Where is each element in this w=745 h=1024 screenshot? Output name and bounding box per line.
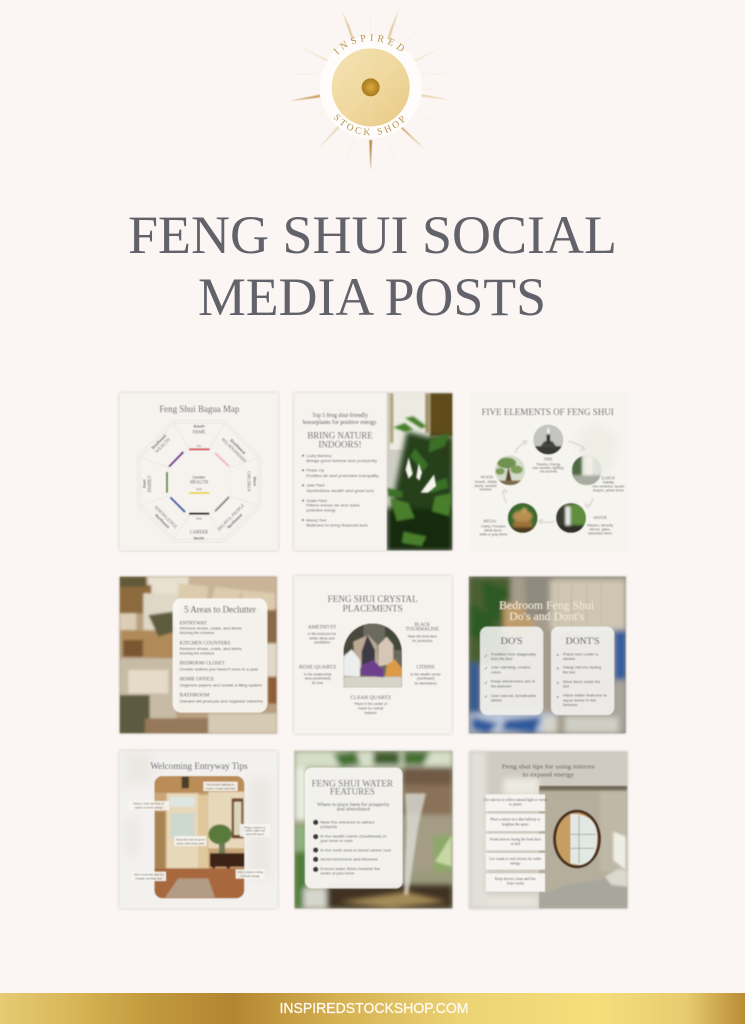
heading: to expand energy	[522, 771, 575, 778]
water feature checklist: Ensure water flows towards the	[320, 867, 380, 871]
element captions: FIRE	[544, 456, 553, 461]
round mirror	[553, 810, 601, 868]
don'ts card	[551, 627, 614, 715]
panel: Five Elements post	[474, 408, 625, 538]
bagua labels: North	[194, 535, 205, 540]
crystal captions	[299, 623, 442, 715]
bagua labels: West	[252, 477, 257, 487]
bagua labels: Center	[193, 475, 206, 480]
water feature checklist: In the wealth corner (Southeast) of	[320, 834, 387, 838]
subheading: houseplants for positive energy.	[303, 419, 378, 426]
title	[128, 205, 617, 327]
plant list: Purifies air and promotes tranquility	[306, 474, 379, 478]
declutter list: blocking the entrance	[180, 651, 214, 655]
subheading	[303, 412, 378, 426]
don'ts card: ×	[556, 653, 559, 658]
crystal captions: area (southwest)	[305, 677, 331, 681]
panel: Mirrors tips post: Use mirrors to reflect natural light or views	[484, 798, 548, 802]
panel: Welcoming Entryway Tips post: create a warm welcome	[205, 786, 236, 790]
plant list: Believed to bring financial luck	[306, 524, 368, 528]
element captions: white or gray items	[479, 532, 508, 536]
panel: Welcoming Entryway Tips post: Add a welcome mat for	[134, 872, 165, 876]
don'ts card: Hang mirrors facing	[563, 666, 601, 670]
bagua labels: Fire	[197, 445, 202, 448]
bagua labels: RELATIONSHIPS	[221, 437, 248, 464]
tip labels	[486, 794, 545, 892]
crystal captions: ROSE QUARTZ	[299, 666, 337, 671]
element captions: Use ceramics, square	[592, 485, 625, 489]
plant list: protective energy	[306, 509, 336, 513]
heading: FENG SHUI CRYSTAL	[328, 594, 418, 604]
panel: Welcoming Entryway Tips post: Keep the door in good	[176, 837, 205, 841]
panel: Welcoming Entryway Tips post: repair with fresh paint	[176, 841, 204, 845]
heading	[502, 764, 595, 778]
crystal captions: In the bedroom for	[308, 632, 337, 636]
do's card: ✓	[484, 694, 488, 700]
panel: Mirrors tips post: energy	[510, 861, 520, 865]
crystal captions: In the wealth corner	[410, 672, 442, 676]
do's card: colors	[491, 671, 501, 675]
card subheading: Where to place them for prosperity	[317, 803, 390, 808]
panel: Mirrors tips post: or plants	[509, 802, 522, 806]
subheading: Top 5 feng shui-friendly	[312, 412, 368, 419]
crystal captions: (southeast)	[417, 677, 434, 681]
tip labels	[128, 782, 270, 881]
panel: Crystal Placements post	[294, 576, 452, 734]
logo: Inspired Stock Shop sun emblem	[290, 11, 450, 170]
declutter list: Remove shoes, coats, and items	[180, 647, 242, 651]
plant list	[302, 454, 379, 528]
crystal captions: Place in the center of	[354, 702, 387, 706]
bedroom photo	[469, 577, 626, 733]
don'ts card: DONT'S	[566, 636, 600, 647]
heading: Feng shui tips for using mirrors	[502, 764, 595, 771]
entryway photo	[154, 776, 245, 898]
bagua labels: Southeast	[150, 433, 168, 450]
element captions: Wisdom, Serenity	[587, 524, 613, 528]
crystal captions: better sleep and	[309, 636, 335, 640]
crystal captions: for love	[312, 681, 323, 685]
bagua octagon	[138, 420, 261, 542]
bagua labels: East	[142, 479, 147, 488]
panel: Welcoming Entryway Tips post: Add a plant to bring	[238, 870, 263, 874]
water feature checklist: Near the entrance to attract	[320, 820, 375, 824]
title: MEDIA POSTS	[198, 267, 546, 327]
plant list: Brings good fortune and prosperity	[306, 459, 377, 463]
bagua labels: KNOWLEDGE	[153, 506, 178, 530]
do's card: Keep electronics out of	[491, 679, 536, 683]
heading: PLACEMENTS	[343, 603, 403, 613]
water feature checklist: center of your home	[320, 872, 354, 876]
bagua labels: FAMILY	[148, 475, 153, 492]
crystal captions: meditation	[314, 641, 330, 645]
element captions: shapes, yellow tones	[593, 488, 624, 492]
panel: Mirrors tips post: Use round or oval mirrors for softer	[489, 857, 542, 861]
panel: Welcoming Entryway Tips post: Use proper lighting to	[206, 783, 235, 787]
element captions: Stability	[603, 481, 614, 485]
do's card: DO'S	[501, 636, 523, 647]
bagua labels: Southwest	[229, 437, 247, 456]
declutter list: blocking the entrance	[180, 631, 214, 635]
declutter list: KITCHEN COUNTERS	[180, 642, 231, 647]
water feature checklist: prosperity	[320, 825, 337, 829]
element captions: black/blue items	[588, 532, 612, 536]
declutter list: BEDROOM CLOSET	[180, 661, 225, 666]
card subheading	[317, 803, 390, 813]
heading: Bedroom Feng Shui	[499, 599, 595, 612]
heading: Welcoming Entryway Tips	[150, 761, 248, 772]
text card	[173, 598, 267, 713]
bagua labels: CHILDREN	[246, 471, 251, 492]
declutter list: Donate clothes you haven't worn in a year	[180, 667, 259, 671]
crystal captions: In the relationship	[304, 672, 331, 676]
text card	[305, 768, 403, 888]
plant photo	[387, 393, 453, 551]
bagua labels: Northeast	[154, 513, 171, 530]
plant list: Money Tree	[306, 518, 327, 522]
do's card: Position bed diagonally	[491, 652, 536, 656]
water feature checklist: In the north area to boost career luck	[320, 848, 391, 852]
crystal arch photo	[343, 623, 402, 687]
panel: Bring Nature Indoors post	[294, 393, 453, 551]
element captions: Metal decor,	[484, 528, 503, 532]
crystal captions: for protection	[412, 639, 433, 643]
declutter list: HOME OFFICE	[180, 678, 214, 683]
don'ts card: Place bed under a	[563, 652, 599, 656]
bagua labels: South	[193, 424, 205, 429]
heading: Feng Shui Bagua Map	[159, 404, 239, 415]
plant list: Symbolizes wealth and good luck	[306, 489, 374, 493]
element captions: Growth, Vitality	[475, 480, 497, 484]
do's card: Use natural, breathable	[491, 694, 536, 698]
bagua labels: Northwest	[226, 512, 244, 530]
water feature checklist	[313, 820, 391, 876]
element captions: red accents	[540, 470, 557, 474]
living room photo	[120, 577, 277, 733]
card heading: FEATURES	[330, 787, 375, 797]
panel: Feng Shui Bagua Map post	[119, 393, 278, 550]
panel: Mirrors tips post: or bed	[511, 842, 520, 846]
element: fire photo	[533, 425, 563, 455]
declutter list: Discard old products and organize toiletries	[180, 700, 263, 704]
bedroom mirror photo	[539, 786, 627, 908]
do's card: Use calming, muted	[491, 666, 530, 670]
crystal captions: AMETHYST	[308, 626, 336, 631]
plant list: Snake Plant	[306, 499, 328, 503]
heading	[307, 432, 373, 450]
element: metal photo	[508, 503, 538, 533]
element captions: METAL	[483, 519, 497, 524]
panel: Bedroom Do's and Don'ts post	[469, 577, 626, 733]
don'ts card: window	[563, 657, 576, 661]
coloured trigram bars	[167, 449, 229, 514]
crystal captions: Near the front door	[408, 634, 438, 638]
don'ts card: bed	[563, 684, 569, 688]
don'ts card: bedroom	[563, 703, 577, 707]
element: earth photo	[572, 455, 602, 485]
bagua labels: HEALTH	[190, 481, 209, 486]
panel: Welcoming Entryway Tips post: reflect light and	[245, 829, 265, 833]
declutter list: BATHROOM	[180, 694, 210, 699]
panel: Welcoming Entryway Tips post: open the space	[246, 832, 265, 836]
don'ts card: aqua tones in the	[563, 698, 596, 702]
fountain photo	[295, 751, 452, 908]
bagua labels	[142, 424, 257, 540]
plant list: Filters indoor air and adds	[306, 504, 360, 508]
heading: BRING NATURE	[307, 432, 373, 442]
element: wood photo	[495, 455, 525, 485]
water feature checklist: Avoid bedrooms and kitchens	[320, 858, 378, 862]
card heading	[311, 780, 394, 797]
element captions: plants, wooden	[474, 484, 497, 488]
footer url: INSPIREDSTOCKSHOP.COM	[280, 1000, 468, 1017]
crystal captions: CLEAR QUARTZ	[350, 696, 391, 701]
bagua labels: CAREER	[190, 530, 209, 535]
crystal captions: CITRINE	[416, 666, 435, 671]
panel: Welcoming Entryway Tips post	[119, 751, 278, 908]
do's card: ✓	[484, 680, 488, 686]
declutter list	[180, 621, 263, 704]
don'ts card: ×	[556, 666, 559, 671]
element captions: Use candles, lighting,	[533, 466, 564, 470]
panel: Welcoming Entryway Tips post: in fresh energy	[241, 874, 260, 878]
element captions: WOOD	[480, 475, 493, 480]
crystal captions: home for overall	[358, 706, 383, 710]
bagua labels: WEALTH	[155, 437, 172, 455]
do's card: ✓	[484, 666, 488, 672]
don'ts card: ×	[556, 694, 559, 699]
panel: Mirrors tips post: from cracks	[507, 881, 525, 885]
heading	[499, 599, 595, 623]
do's card: ✓	[484, 653, 488, 659]
plant list: Lucky Bamboo	[306, 454, 332, 458]
panel: Welcoming Entryway Tips post: Hang a mirror to	[244, 825, 266, 829]
card heading: FENG SHUI WATER	[311, 780, 394, 790]
panel: Water Features post	[295, 751, 452, 908]
panel: Mirrors tips post: brighten the space	[502, 822, 529, 826]
do's card: the bedroom	[491, 684, 512, 688]
panel: Welcoming Entryway Tips post: clutter to invite energy	[134, 806, 163, 810]
panel: Mirrors tips post	[470, 752, 627, 908]
footer bar	[0, 993, 745, 1024]
element captions	[474, 456, 625, 536]
declutter list: ENTRYWAY	[180, 621, 208, 626]
declutter list: Organize papers and create a filing system	[180, 683, 262, 687]
element captions: EARTH	[602, 475, 615, 480]
element: water photo	[556, 503, 586, 533]
element captions: Passion, Energy	[536, 462, 561, 466]
element captions: WATER	[593, 515, 607, 520]
don'ts card: ×	[556, 681, 559, 686]
don'ts card: Have water features or	[563, 694, 608, 698]
logo wordmark top: INSPIRED	[333, 34, 404, 55]
logo wordmark bottom: STOCK SHOP	[334, 114, 404, 136]
heading: FIVE ELEMENTS OF FENG SHUI	[481, 407, 614, 418]
crystal captions: balance	[365, 711, 377, 715]
don'ts card: Store items under the	[563, 680, 600, 684]
cycle arrows	[502, 441, 593, 524]
panel: Mirrors tips post: Keep mirrors clean and free	[495, 877, 536, 881]
panel: Welcoming Entryway Tips post: a bright, inviting start	[135, 876, 162, 881]
panel: Mirrors tips post: Avoid mirrors facing the front door	[490, 838, 542, 842]
card subheading: and abundance	[337, 808, 370, 813]
element captions: furniture	[480, 488, 492, 492]
do's card: from the door	[491, 657, 514, 661]
element captions: Mirrors, glass,	[590, 528, 611, 532]
plant list: Jade Plant	[306, 484, 325, 488]
declutter list: Remove shoes, coats, and items	[180, 627, 242, 631]
do's card	[480, 627, 543, 715]
panel: Welcoming Entryway Tips post: Keep it clear and free of	[133, 802, 165, 806]
don'ts card: the bed	[563, 671, 575, 675]
card heading: 5 Areas to Declutter	[184, 605, 257, 615]
bagua labels: FAME	[193, 431, 205, 436]
title: FENG SHUI SOCIAL	[128, 205, 617, 265]
bagua labels: Water	[196, 517, 202, 520]
crystal captions: for abundance	[415, 681, 437, 685]
element captions: Clarity, Precision	[481, 524, 506, 528]
heading	[328, 594, 418, 613]
panel: Mirrors tips post: Place a mirror in a dim hallway to	[490, 818, 540, 822]
water feature checklist: your home or room	[320, 839, 353, 843]
bagua labels: Earth	[196, 488, 203, 491]
panel: 5 Areas to Declutter post	[120, 577, 277, 733]
heading: Do's and Dont's	[509, 610, 585, 623]
heading: INDOORS!	[318, 440, 362, 450]
do's card: fabrics	[491, 699, 502, 703]
bagua labels: HELPFUL PEOPLE	[216, 503, 246, 532]
plant list: Peace Lily	[306, 469, 324, 473]
crystal captions: BLACK	[414, 623, 431, 628]
crystal captions: TOURMALINE	[406, 628, 439, 633]
